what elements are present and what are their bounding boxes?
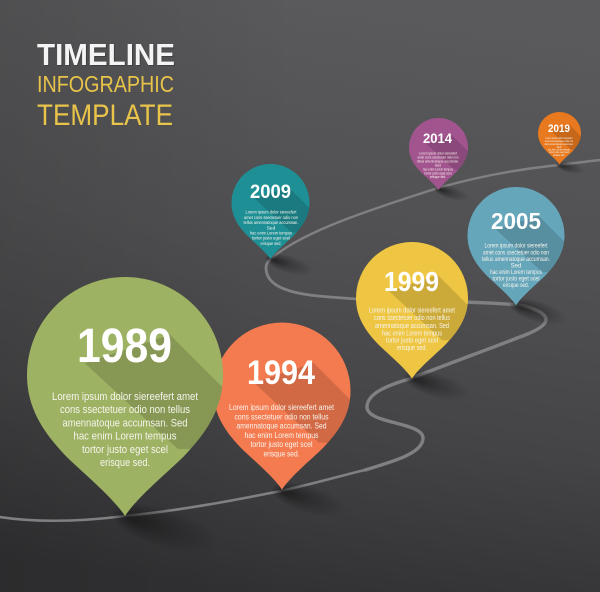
pin: 2014: Sed bbox=[435, 164, 441, 168]
pin: 2014: Lorem ipsum dolor siereefert bbox=[419, 152, 457, 156]
pin: 2009: tortor justo eget scel bbox=[252, 236, 290, 242]
pin: 2014: hac enim Lorem tempus bbox=[423, 167, 453, 171]
pin: 1994: 1994 bbox=[247, 354, 315, 392]
pin: 1999: amennatoque accumsan. Sed bbox=[375, 323, 449, 330]
pin: 2019: Sed bbox=[557, 145, 562, 149]
pin: 2005: tellus amennatoque accumsan. bbox=[482, 257, 550, 263]
pin: 1989: erisque sed. bbox=[100, 457, 150, 469]
pin: 1994 bbox=[216, 322, 350, 490]
pin: 2019: 2019 bbox=[548, 123, 570, 135]
pin: 2005: Lorem ipsum dolor siereefert bbox=[484, 244, 548, 250]
pin: 2009: erisque sed. bbox=[260, 241, 282, 247]
pin: 1989 bbox=[27, 277, 223, 516]
timeline road bbox=[0, 160, 600, 521]
pin: 1999: hac enim Lorem tempus bbox=[382, 330, 442, 338]
pin: 2009: Sed bbox=[267, 225, 276, 231]
pin: 2009 bbox=[232, 164, 310, 259]
pin: 2019: tellus amennatoque accumsan. bbox=[544, 142, 574, 146]
pin: 2005: Sed bbox=[511, 263, 521, 269]
pin: 1994: tortor justo eget scel bbox=[250, 440, 313, 449]
pin: 2019: Lorem ipsum dolor siereefert bbox=[546, 136, 573, 140]
pin: 2014: erisque sed. bbox=[430, 175, 446, 179]
title: TIMELINE bbox=[37, 37, 175, 72]
pin: 1989: amennatoque accumsan. Sed bbox=[62, 417, 188, 429]
pin: 2005: hac enim Lorem tempus bbox=[490, 270, 542, 276]
pin: 2014 bbox=[409, 118, 468, 190]
pin: 1999: 1999 bbox=[384, 266, 439, 297]
pin: 2009: amet cons ssectetuer odio non bbox=[244, 215, 298, 221]
title: TEMPLATE bbox=[37, 99, 173, 132]
pin: 2005 bbox=[468, 187, 564, 306]
pin: 1989: 1989 bbox=[77, 320, 172, 373]
pin: 2005: erisque sed. bbox=[503, 283, 529, 289]
pin: 2014: tellus amennatoque accumsan. bbox=[417, 160, 459, 164]
pin: 2005: 2005 bbox=[491, 208, 541, 234]
title: INFOGRAPHIC bbox=[37, 71, 174, 97]
pin: 2019: hac enim Lorem tempus bbox=[548, 148, 571, 152]
tip shadows bbox=[106, 159, 586, 564]
pin: 1989: Lorem ipsum dolor siereefert amet bbox=[52, 391, 199, 403]
pin: 1999 bbox=[356, 242, 468, 378]
pin: 1999: tortor justo eget scel bbox=[386, 338, 438, 344]
pin: 1994: erisque sed. bbox=[264, 450, 300, 458]
pin: 2009: 2009 bbox=[250, 182, 291, 203]
title: TIMELINE bbox=[38, 38, 176, 73]
pin: 2014: tortor justo eget scel bbox=[424, 171, 452, 175]
pin: 2019: erisque sed. bbox=[553, 153, 565, 157]
pin: 2014: amet cons ssectetuer odio non bbox=[418, 156, 459, 160]
pin: 2019 bbox=[538, 112, 581, 164]
pin: 2005: tortor justo eget scel bbox=[492, 276, 540, 282]
pin: 2009: hac enim Lorem tempus bbox=[250, 231, 292, 237]
pin: 2009: tellus amennatoque accumsan. bbox=[244, 220, 298, 226]
pin: 1989: tortor justo eget scel bbox=[82, 444, 168, 456]
pin: 1994: Lorem ipsum dolor siereefert amet bbox=[229, 403, 335, 412]
pin: 2019: tortor justo eget scel bbox=[549, 150, 569, 154]
pin: 1999: cons ssectetuer odio non tellus bbox=[374, 315, 450, 322]
title bbox=[37, 37, 176, 132]
pin: 1994: amennatoque accumsan. Sed bbox=[236, 422, 326, 431]
pin: 1989: cons ssectetuer odio non tellus bbox=[60, 404, 190, 416]
pin: 2009: Lorem ipsum dolor siereefert bbox=[246, 210, 297, 216]
pin: 1999: erisque sed. bbox=[397, 345, 427, 352]
pin: 2019: amet cons ssectetuer odio non bbox=[545, 139, 573, 143]
pin: 1989: hac enim Lorem tempus bbox=[74, 431, 177, 443]
pin: 1994: cons ssectetuer odio non tellus bbox=[234, 412, 328, 421]
pin: 2005: amet cons ssectetuer odio non bbox=[483, 250, 549, 256]
pin: 2014: 2014 bbox=[423, 130, 452, 146]
pin: 1994: hac enim Lorem tempus bbox=[244, 431, 318, 440]
pin: 1999: Lorem ipsum dolor siereefert amet bbox=[369, 308, 455, 314]
